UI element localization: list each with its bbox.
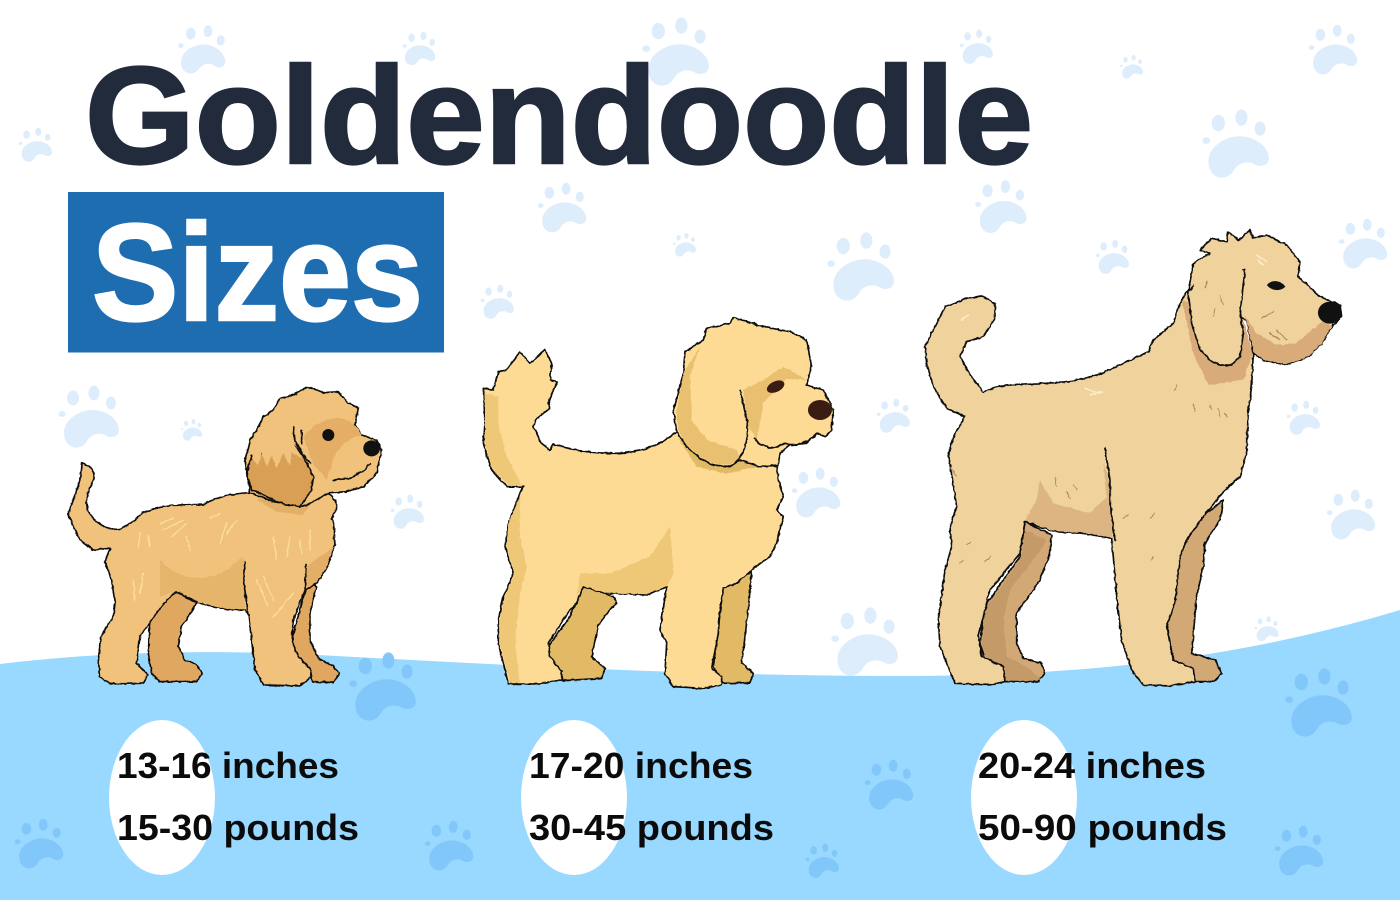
blue ground band — [0, 610, 1400, 900]
darker paw prints on ground — [15, 652, 1352, 878]
icon: paw print — [58, 386, 119, 448]
icon: paw print — [538, 183, 586, 232]
icon: paw print — [391, 495, 424, 529]
fur highlights — [133, 513, 310, 617]
size label: large — [971, 720, 1227, 875]
icon: paw print — [1285, 668, 1352, 737]
near front leg inner line — [243, 562, 306, 613]
leg inner line — [1105, 448, 1115, 540]
icon: paw print — [806, 844, 839, 878]
belly shade — [577, 527, 673, 597]
ear upper fur — [252, 423, 302, 468]
far hind leg dark band — [982, 530, 1047, 681]
size label: medium — [521, 720, 774, 875]
nose — [1318, 302, 1342, 324]
eye — [322, 429, 334, 441]
chest shade — [305, 547, 334, 589]
icon: paw print — [1327, 490, 1375, 539]
ear — [247, 443, 313, 507]
icon: paw print — [1275, 826, 1323, 875]
icon: paw print — [877, 399, 910, 433]
icon: paw print — [1287, 401, 1320, 435]
ear and mouth lines — [730, 390, 817, 467]
icon: paw print — [1309, 25, 1357, 74]
title: Goldendoodle: Goldendoodle — [85, 39, 1033, 193]
belly shade — [160, 557, 245, 609]
belly shade — [1026, 463, 1113, 538]
icon: paw print — [792, 468, 840, 517]
far hind leg — [980, 522, 1052, 682]
face shade — [303, 418, 362, 480]
small dog illustration — [68, 387, 382, 686]
large dog illustration — [925, 230, 1342, 686]
icon: paw print — [1339, 219, 1387, 268]
icon: paw print — [673, 233, 696, 257]
size label: large: 20-24 inches — [978, 745, 1206, 786]
icon: paw print — [1254, 616, 1279, 641]
size label: large: 50-90 pounds — [978, 807, 1227, 848]
icon: paw print — [181, 419, 202, 441]
neck shade — [678, 438, 763, 474]
icon: paw print — [425, 821, 473, 870]
size label: medium: 17-20 inches — [529, 745, 753, 786]
far front leg — [1167, 500, 1223, 682]
head — [673, 317, 833, 467]
ear shade — [677, 347, 740, 465]
size label: small — [109, 720, 359, 875]
nose — [808, 400, 832, 420]
tail shade — [485, 393, 522, 485]
mouth — [333, 463, 370, 480]
eye — [765, 378, 786, 395]
ear top fur cover — [1192, 263, 1243, 310]
highlights — [962, 255, 1267, 395]
far front leg — [292, 580, 339, 683]
icon: paw print — [401, 30, 437, 67]
icon: paw print — [1120, 55, 1143, 79]
medium dog illustration — [483, 317, 833, 688]
icon: paw print — [960, 30, 993, 64]
muzzle shade — [1245, 315, 1332, 364]
icon: paw print — [865, 760, 913, 809]
nose — [363, 440, 380, 456]
icon: paw print — [642, 17, 709, 86]
icon: paw print — [975, 180, 1027, 233]
head — [1188, 230, 1342, 365]
heading badge: Sizes: Sizes — [92, 196, 423, 350]
icon: paw print — [176, 23, 228, 76]
icon: paw print — [1202, 109, 1269, 178]
body and near legs — [925, 292, 1253, 686]
icon: paw print — [831, 607, 898, 676]
ear — [1188, 270, 1245, 365]
icon: paw print — [349, 652, 416, 721]
fur marks — [950, 282, 1287, 563]
body and near legs — [483, 349, 783, 688]
background paw prints on white — [19, 17, 1387, 676]
side shade — [500, 497, 527, 683]
ear inner line — [293, 427, 310, 463]
icon: paw print — [1096, 240, 1129, 274]
body and near legs — [68, 463, 337, 686]
icon: paw print — [481, 285, 514, 319]
head — [245, 387, 382, 507]
neck shade — [257, 493, 313, 515]
neck shade — [1182, 300, 1253, 385]
size label: small: 13-16 inches — [117, 745, 339, 786]
far front leg — [713, 572, 753, 683]
eye — [1267, 281, 1285, 290]
face shade — [743, 367, 807, 438]
icon: paw print — [15, 819, 63, 868]
size label: small: 15-30 pounds — [117, 807, 359, 848]
icon: paw print — [19, 128, 52, 162]
icon: paw print — [827, 232, 894, 301]
size label: medium: 30-45 pounds — [529, 807, 774, 848]
far hind leg — [548, 587, 617, 681]
far hind leg — [148, 590, 203, 682]
